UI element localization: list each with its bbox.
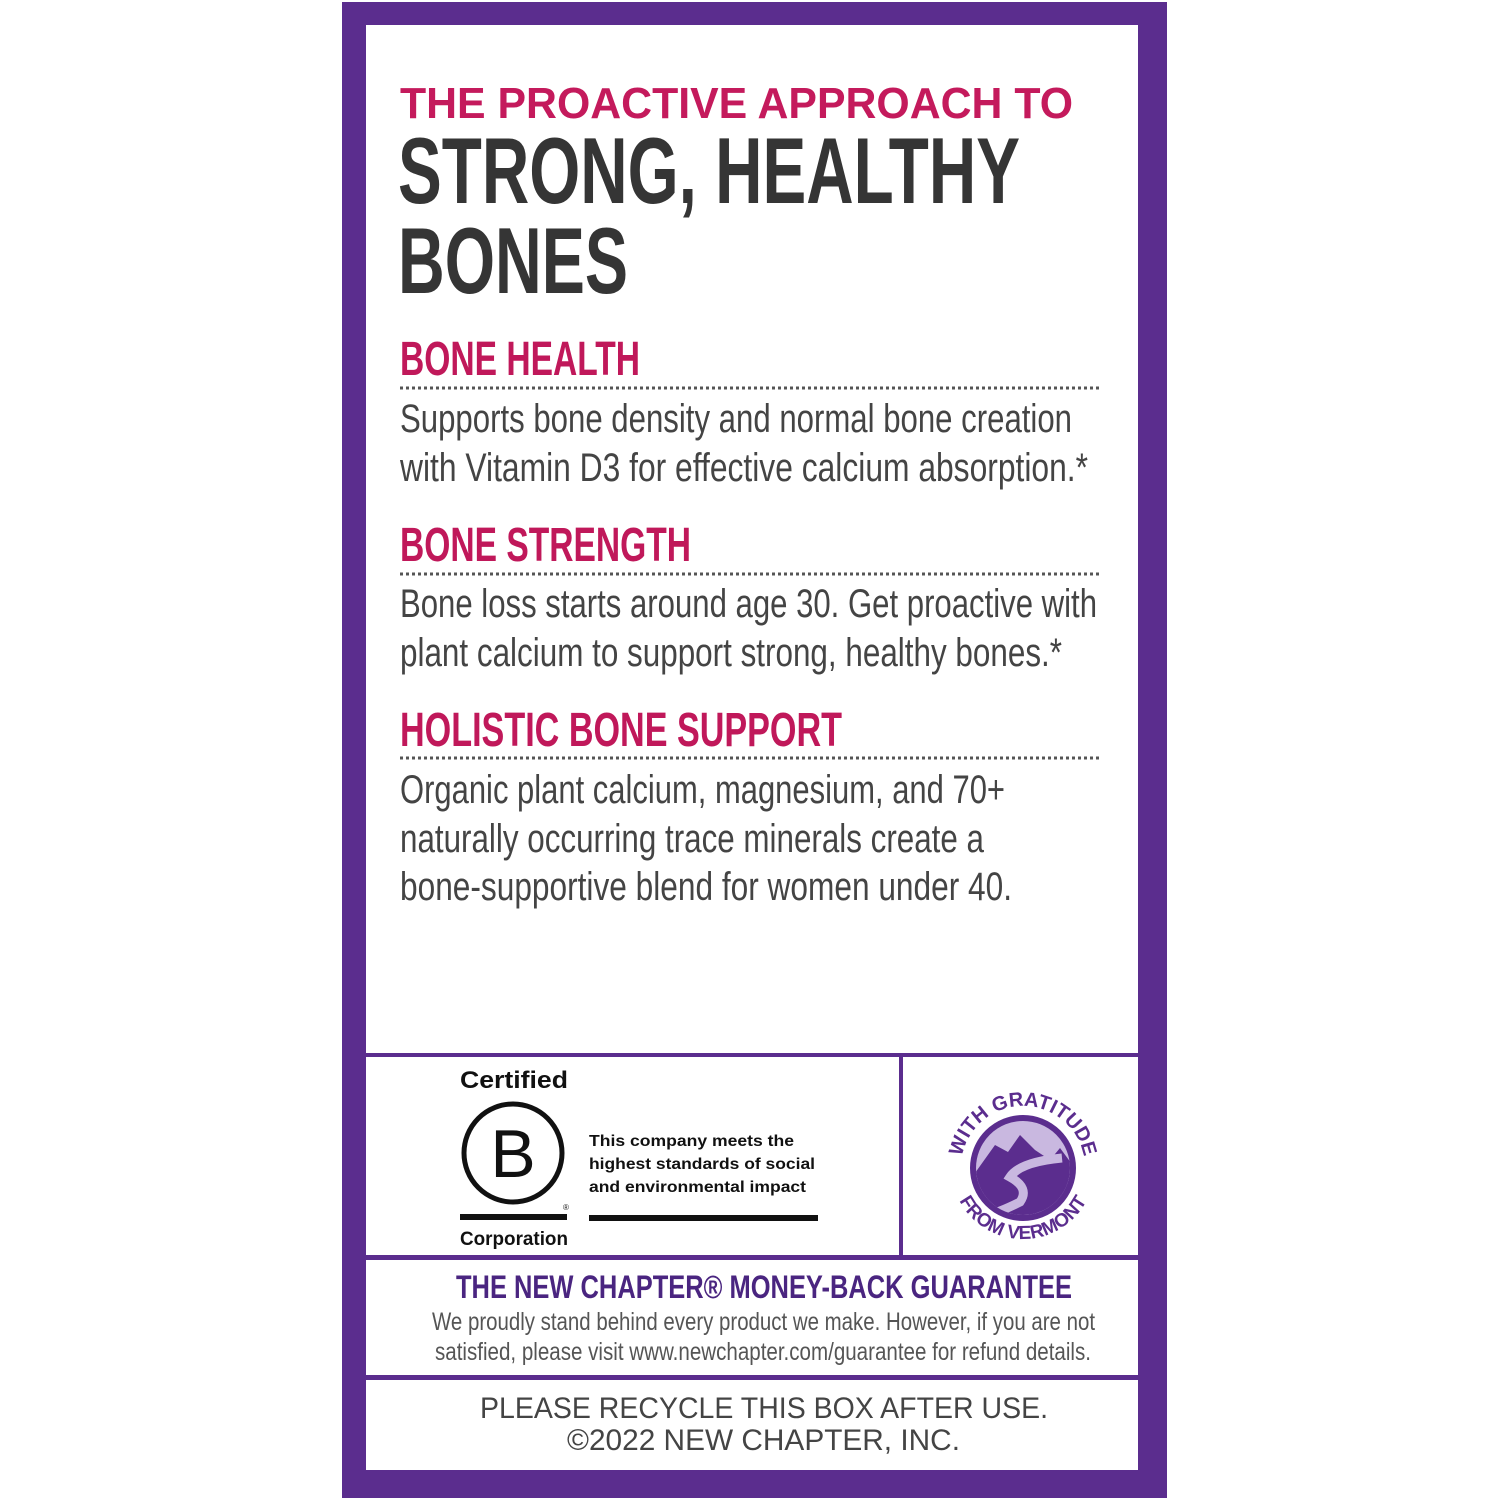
icon: certified B corporation: Corporation: [460, 1229, 568, 1250]
icon: certified B corporation: ®: [563, 1203, 569, 1212]
panel: purple frame: [342, 2, 1167, 1498]
icon: with gratitude from vermont: [948, 1092, 1098, 1240]
title: [398, 79, 1073, 313]
title: THE PROACTIVE APPROACH TO: [400, 79, 1073, 128]
icon: certified B corporation: Certified: [460, 1067, 568, 1094]
section: bone health: Supports bone density and normal bone creation: [400, 397, 1072, 441]
guarantee: THE NEW CHAPTER® MONEY-BACK GUARANTEE: [456, 1269, 1072, 1305]
section: holistic bone support: [400, 704, 1102, 909]
guarantee: [432, 1269, 1095, 1366]
icon: certified B corporation: This company meets the: [589, 1133, 794, 1150]
guarantee: We proudly stand behind every product we make. However, if you are not: [432, 1308, 1095, 1336]
section: holistic bone support: Organic plant calcium, magnesium, and 70+: [400, 768, 1005, 812]
title: STRONG, HEALTHY: [398, 118, 1020, 223]
icon: certified B corporation: highest standards of social: [589, 1156, 815, 1173]
section: bone strength: plant calcium to support strong, healthy bones.*: [400, 631, 1062, 675]
section: bone strength: [400, 519, 1102, 675]
icon: with gratitude from vermont: WITH GRATITUDE: [948, 1092, 1098, 1156]
section: holistic bone support: HOLISTIC BONE SUPPORT: [400, 704, 842, 757]
title: BONES: [398, 208, 628, 313]
icon: certified B corporation: B: [490, 1116, 536, 1192]
footer: recycle: ©2022 NEW CHAPTER, INC.: [567, 1424, 960, 1457]
footer: recycle: PLEASE RECYCLE THIS BOX AFTER USE.: [480, 1392, 1048, 1425]
section: bone health: BONE HEALTH: [400, 333, 640, 386]
footer: recycle: [480, 1392, 1048, 1457]
section: bone strength: BONE STRENGTH: [400, 519, 691, 572]
section: bone health: with Vitamin D3 for effective calcium absorption.*: [399, 446, 1088, 490]
section: bone health: [399, 333, 1102, 490]
section: holistic bone support: naturally occurring trace minerals create a: [400, 817, 985, 861]
guarantee: satisfied, please visit www.newchapter.com/guarantee for refund details.: [435, 1338, 1091, 1366]
section: bone strength: Bone loss starts around age 30. Get proactive with: [400, 582, 1097, 626]
section: holistic bone support: bone-supportive blend for women under 40.: [400, 865, 1012, 909]
icon: with gratitude from vermont: FROM VERMONT: [960, 1194, 1084, 1240]
icon: certified B corporation: and environmental impact: [589, 1179, 807, 1196]
icon: certified B corporation: [460, 1067, 818, 1250]
